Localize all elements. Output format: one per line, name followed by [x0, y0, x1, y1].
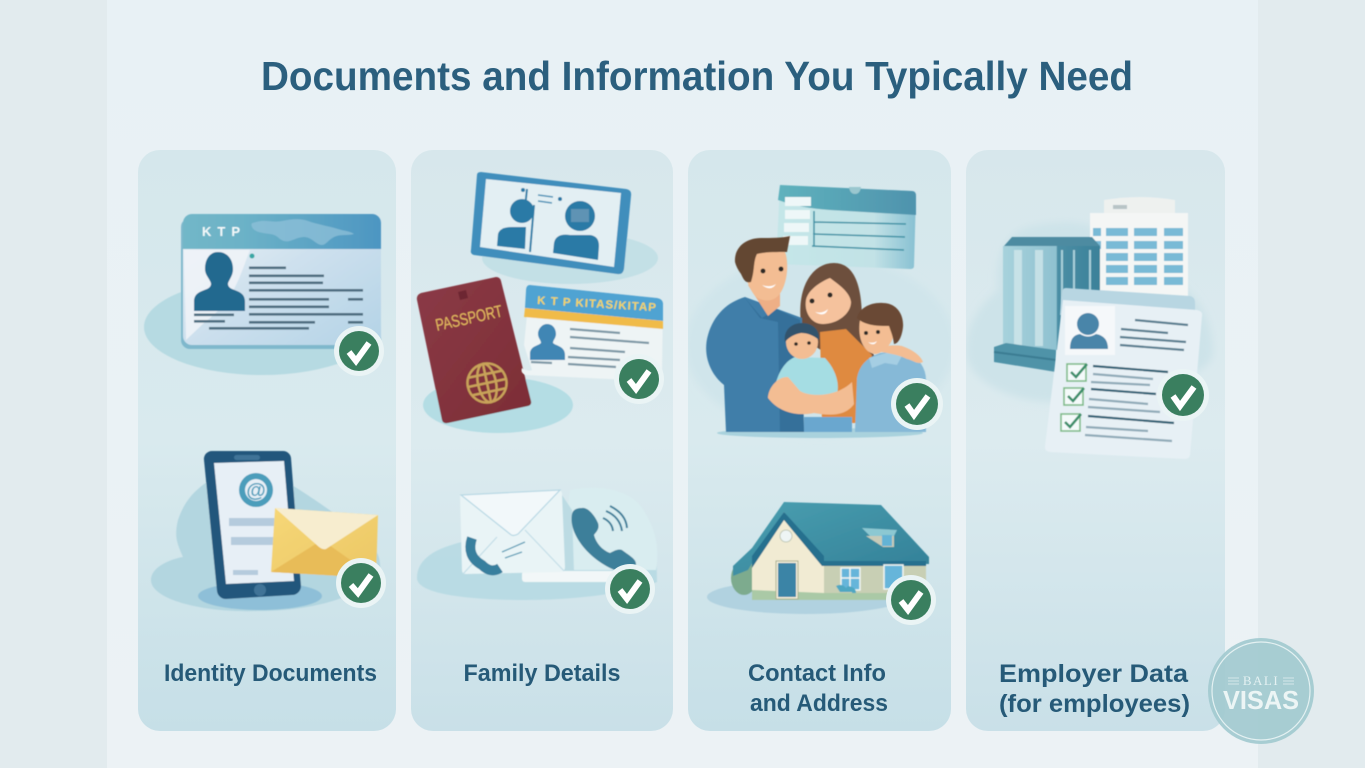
label: identity documents: Identity Documents [164, 660, 377, 687]
panel background: employer [966, 150, 1225, 731]
illustration: address form [776, 185, 916, 269]
logo: Bali Visas [1208, 638, 1314, 744]
illustration: passport: PASSPORT [434, 302, 504, 335]
illustration: KTP card: KTP [202, 224, 246, 239]
label: employer data for employees: Employer Data [999, 660, 1189, 688]
panel: employer data [966, 150, 1225, 731]
logo: Bali Visas: BALI [1243, 673, 1279, 688]
boy [855, 303, 926, 432]
illustration: family [706, 236, 926, 438]
illustration: KITAS card [522, 285, 663, 381]
illustration: house [707, 502, 929, 614]
icon: check badge [336, 558, 386, 608]
woman [800, 263, 876, 432]
illustration: KITAS card: K T P KITAS/KITAP [537, 295, 657, 314]
illustration: phone and envelope: @ [246, 480, 266, 502]
label: family details: Family Details [464, 660, 620, 687]
icon: check badge [886, 575, 936, 625]
man [706, 236, 804, 432]
decorative blob behind buildings [966, 222, 1213, 402]
label: contact info and address: and Address [750, 690, 888, 717]
panel background: contact [688, 150, 951, 731]
baby and holding arms [768, 323, 854, 415]
label: contact info and address: Contact Info [748, 660, 886, 687]
illustration: KTP card [144, 214, 381, 375]
panel background: family [411, 150, 673, 731]
illustration: employer form [1045, 288, 1202, 459]
icon: check badge [334, 326, 384, 376]
panel: contact info and address [685, 150, 955, 731]
illustration: envelope and phones [417, 488, 657, 600]
illustration: passport [417, 277, 573, 433]
icon: check badge [891, 378, 943, 430]
title: Documents and Information You Typically Need [261, 53, 1133, 99]
label: contact info and address [748, 660, 888, 717]
panel: identity documents [138, 150, 396, 731]
icon: check badge [1157, 369, 1209, 421]
decorative blob behind family [698, 370, 941, 426]
icon: check badge [605, 564, 655, 614]
illustration: family card tablet [471, 172, 658, 284]
illustration: phone and envelope [151, 451, 380, 611]
label: employer data for employees: (for employees) [999, 690, 1190, 718]
icon: check badge [614, 354, 664, 404]
logo: Bali Visas: VISAS [1223, 685, 1299, 715]
panel: family details [411, 150, 673, 731]
label: employer data for employees [999, 660, 1190, 718]
illustration: office buildings [994, 197, 1188, 372]
panel background: identity [138, 150, 396, 731]
